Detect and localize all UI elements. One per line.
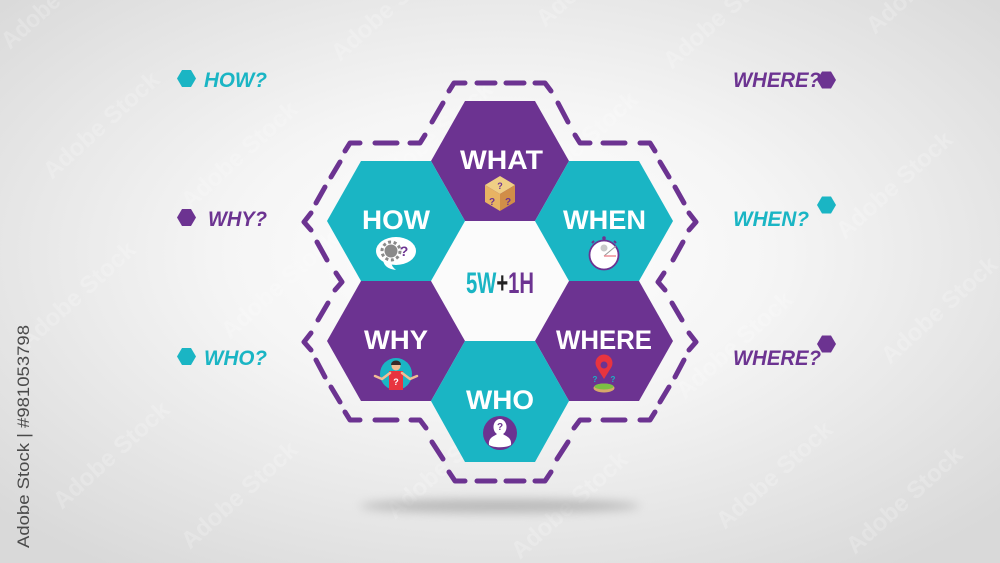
hexagon: center 5W+1H: [431, 221, 569, 341]
hexagon: WHO: WHO: [466, 385, 534, 415]
stock id side text: Adobe Stock | #981053798: [14, 325, 33, 548]
icon: map pin: ?: [611, 375, 616, 384]
hexagon: WHY: WHY: [364, 325, 428, 355]
icon: mystery box: ?: [489, 197, 495, 208]
label: HOW?: [177, 69, 267, 92]
icon: anonymous person: ?: [497, 422, 503, 433]
icon: map pin: [593, 355, 616, 392]
icon: confused person: ?: [393, 377, 399, 387]
icon: stopwatch: [590, 236, 618, 270]
watermarks: Adobe Stock: [48, 396, 176, 514]
watermarks: Adobe Stock: [14, 236, 142, 354]
label: WHY?: [177, 208, 267, 231]
watermarks: Adobe Stock: [38, 66, 166, 184]
label: WHO?: WHO?: [204, 347, 267, 370]
hexagon: WHEN: WHEN: [563, 205, 646, 235]
label: WHO?: [177, 347, 267, 370]
hexagon: WHY: [327, 281, 465, 401]
hexagon: WHAT: [431, 101, 569, 221]
watermarks: Adobe Stock: [516, 86, 644, 204]
dashed outline: [304, 83, 696, 481]
watermarks: Adobe Stock: [671, 286, 799, 404]
label: WHY?: WHY?: [208, 208, 267, 231]
watermarks: Adobe Stock: [506, 446, 634, 563]
hexagon: WHEN: [535, 161, 673, 281]
watermarks: Adobe Stock: [176, 436, 304, 554]
hexagon: WHAT: WHAT: [460, 145, 544, 175]
label: WHEN?: [733, 196, 836, 231]
label: HOW?: HOW?: [204, 69, 267, 92]
watermarks: Adobe Stock: [711, 416, 839, 534]
icon: mystery box: ?: [505, 197, 511, 208]
watermarks: Adobe Stock: [371, 76, 499, 194]
icon: mystery box: ?: [497, 181, 503, 191]
icon: mystery box: [485, 176, 515, 211]
label: WHERE? bottom: WHERE?: [733, 347, 821, 370]
hexagon: WHERE: WHERE: [556, 325, 652, 355]
watermarks: Adobe Stock: [841, 441, 969, 559]
ground shadow: [360, 499, 640, 513]
hexagon: WHERE: [535, 281, 673, 401]
label: WHEN?: WHEN?: [733, 208, 809, 231]
hexagon: WHO: [431, 341, 569, 462]
watermarks: Adobe Stock: [381, 406, 509, 524]
hexagon: center 5W+1H: 5W+1H: [466, 267, 534, 300]
hexagon: HOW: [327, 161, 465, 281]
watermarks: Adobe Stock: [216, 226, 344, 344]
watermarks: Adobe Stock: [176, 96, 304, 214]
watermarks: Adobe Stock: [831, 126, 959, 244]
icon: speech bubble with gear: ?: [400, 243, 408, 259]
hexagon: HOW: HOW: [362, 205, 431, 235]
icon: map pin: ?: [593, 375, 598, 384]
watermarks: Adobe Stock: [876, 251, 1000, 369]
label: WHERE? bottom: [733, 336, 836, 370]
label: WHERE? top: WHERE?: [733, 69, 821, 92]
